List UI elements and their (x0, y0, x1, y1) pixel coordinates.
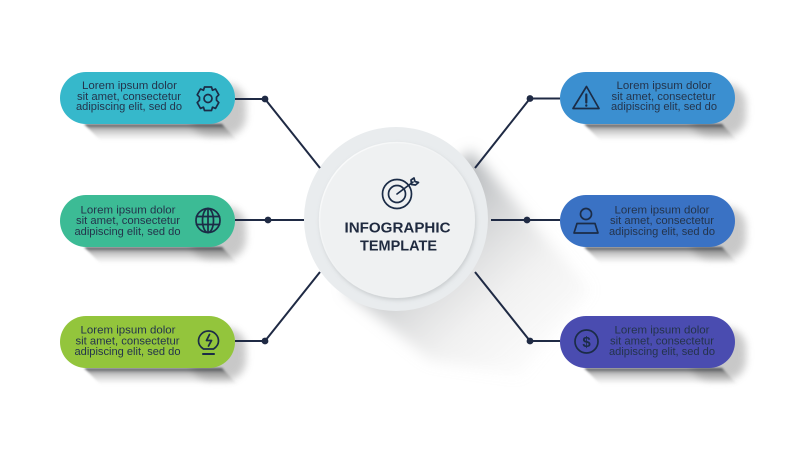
panel: person card: Lorem ipsum dolor (614, 204, 710, 216)
connector lines (235, 95, 560, 344)
panel: light bulb card (60, 316, 246, 385)
panel: globe card: sit amet, consectetur (76, 215, 180, 227)
central circle (304, 127, 590, 375)
panel: gear card: sit amet, consectetur (77, 91, 181, 103)
icon: light bulb (198, 331, 218, 354)
panel: dollar card: Lorem ipsum dolor (614, 324, 710, 336)
panel: warning card: sit amet, consectetur (612, 91, 716, 103)
icon: dollar coin (575, 330, 598, 353)
panel: dollar card: adipiscing elit, sed do (609, 346, 715, 358)
title: INFOGRAPHIC (344, 220, 451, 236)
panel: globe card (60, 195, 246, 264)
icon: person (574, 208, 598, 233)
panel: person card: adipiscing elit, sed do (609, 226, 715, 238)
panel: light bulb card: adipiscing elit, sed do (74, 346, 180, 358)
panel: globe card: Lorem ipsum dolor (80, 204, 176, 216)
panel: warning card: Lorem ipsum dolor (616, 80, 712, 92)
panel: light bulb card: sit amet, consectetur (76, 336, 180, 348)
panel: light bulb card: Lorem ipsum dolor (80, 324, 176, 336)
panel: person card (560, 195, 746, 264)
panel: gear card (60, 72, 246, 141)
panel: warning card (560, 72, 746, 141)
panel: warning card: adipiscing elit, sed do (611, 101, 717, 113)
title (344, 220, 451, 254)
panel: globe card: adipiscing elit, sed do (74, 226, 180, 238)
icon: globe (196, 208, 220, 232)
icon: target (382, 178, 418, 208)
title: TEMPLATE (360, 238, 437, 254)
panel: person card: sit amet, consectetur (610, 215, 714, 227)
central circle long shadow (345, 150, 590, 375)
icon: warning triangle (573, 86, 599, 108)
panel: gear card: adipiscing elit, sed do (76, 101, 182, 113)
panel: dollar card: sit amet, consectetur (610, 336, 714, 348)
panel: gear card: Lorem ipsum dolor (82, 80, 177, 92)
panel: dollar card (560, 316, 746, 385)
icon: dollar coin: $ (582, 334, 591, 351)
icon: gear (197, 87, 219, 111)
